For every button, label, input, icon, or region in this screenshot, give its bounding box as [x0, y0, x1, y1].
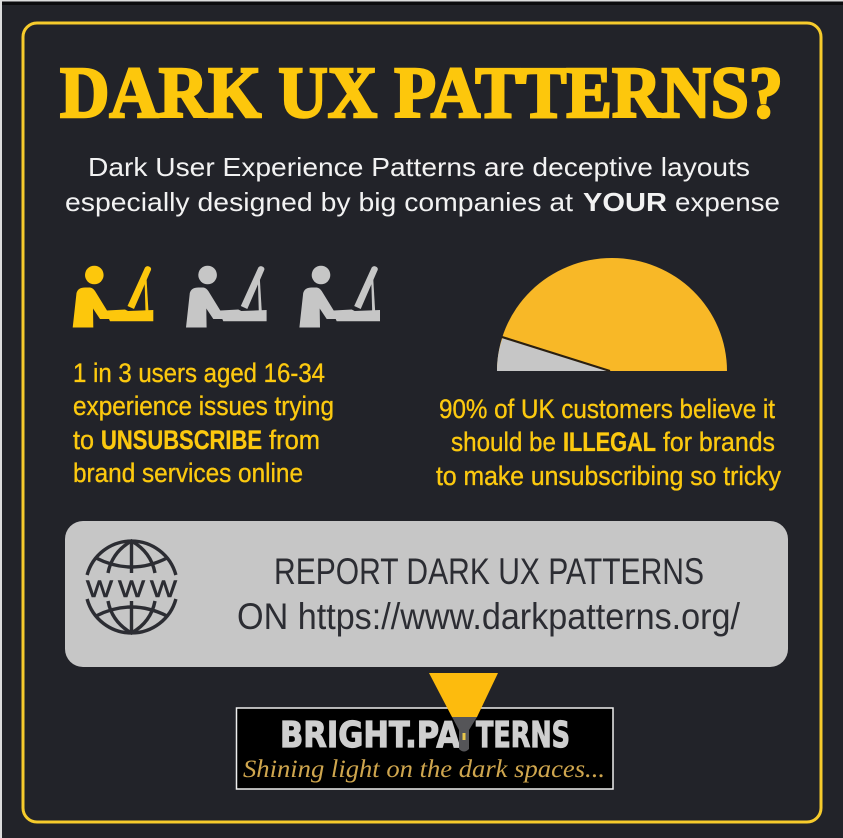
left statistic text: 1 in 3 users aged 16-34 [73, 358, 325, 388]
subtitle: YOUR [583, 187, 667, 217]
left statistic text: from [269, 425, 320, 455]
icon: grey user at desk [186, 266, 267, 328]
right statistic text [436, 394, 781, 491]
right statistic text: ILLEGAL [563, 427, 656, 457]
left statistic text: UNSUBSCRIBE [101, 425, 262, 455]
right statistic text: to make unsubscribing so tricky [436, 461, 781, 491]
icon: yellow user at desk [73, 266, 153, 328]
subtitle: expense [675, 187, 780, 217]
right statistic text: for brands [663, 427, 775, 457]
icon: www globe [86, 541, 177, 633]
icon: grey user at desk [299, 266, 380, 328]
left statistic text [73, 358, 334, 488]
semicircle chart: 90% believe [497, 258, 727, 371]
icon: www globe: W [118, 576, 145, 603]
subtitle: Dark User Experience Patterns are deceptive layouts [88, 152, 750, 182]
subtitle [65, 152, 780, 217]
left statistic text: to [73, 425, 94, 455]
report text: REPORT DARK UX PATTERNS [274, 551, 704, 592]
icon: www globe: W [150, 576, 177, 603]
left statistic text: experience issues trying [73, 391, 334, 421]
logo tagline: Shining light on the dark spaces... [243, 756, 605, 783]
report text: ON https://www.darkpatterns.org/ [237, 596, 741, 637]
icon row: three users at desks [73, 266, 380, 328]
icon: torch with yellow beam [429, 673, 498, 752]
logo wordmark: TERNS [476, 715, 570, 756]
logo: Bright Patterns [236, 673, 613, 789]
title: DARK UX PATTERNS? [60, 52, 783, 133]
right statistic text: should be [451, 427, 556, 457]
subtitle: especially designed by big companies at [65, 187, 574, 217]
report text [237, 551, 741, 637]
panel: report call to action [65, 521, 788, 667]
icon: www globe: W [86, 576, 113, 603]
left statistic text: brand services online [73, 458, 303, 488]
right statistic text: 90% of UK customers believe it [439, 394, 775, 424]
logo wordmark: BRIGHT.PA [280, 715, 460, 756]
